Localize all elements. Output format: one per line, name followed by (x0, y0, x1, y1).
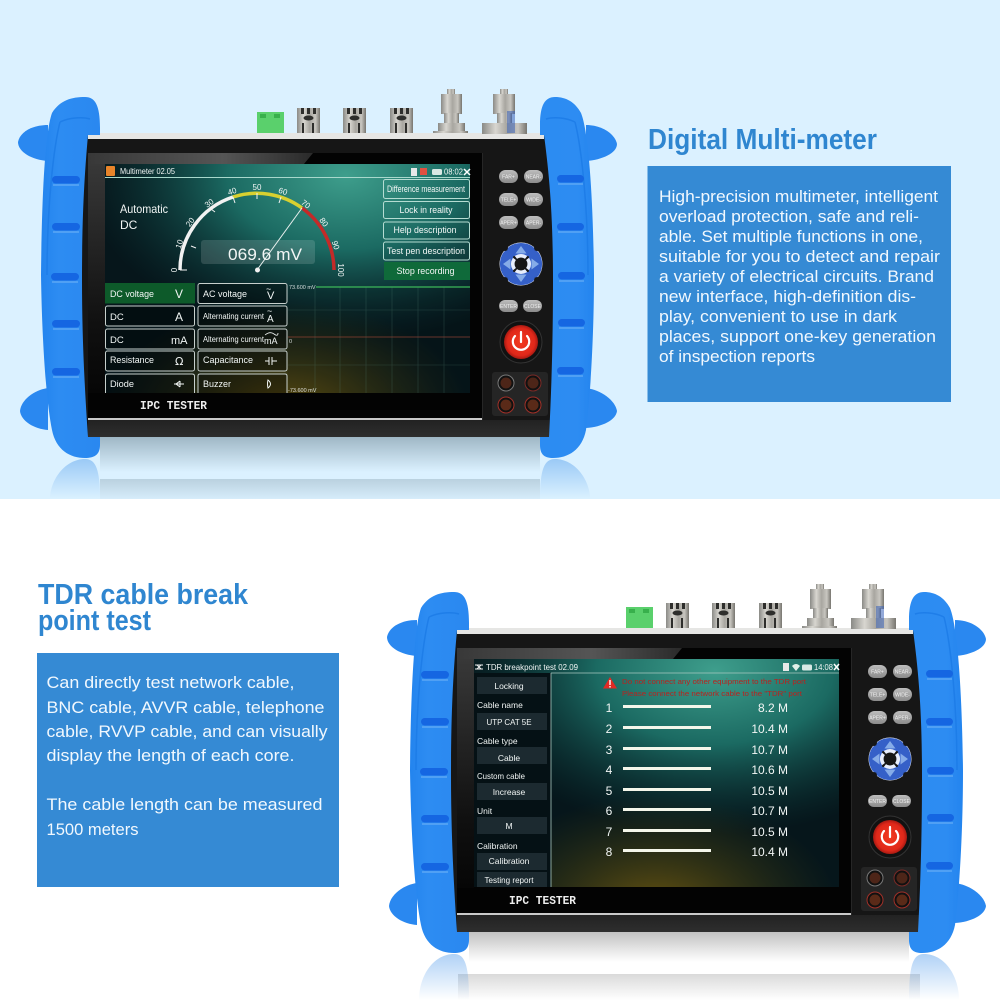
settings column: Cable type (477, 736, 518, 746)
settings column: Calibration (477, 841, 518, 851)
cable core results (606, 701, 788, 859)
measurement mode buttons: Buzzer (203, 379, 231, 390)
panel: multimeter description: High-precision multimeter, intelligent (659, 187, 938, 206)
gauge: 90 (330, 240, 341, 251)
device shell (18, 89, 617, 458)
measurement mode buttons: mA (171, 335, 188, 347)
screen (105, 164, 470, 394)
gauge: 0 (170, 267, 179, 272)
title bar: 14:08 (814, 663, 834, 672)
gauge: 100 (336, 263, 345, 277)
waveform chart: 73.600 mV (289, 285, 316, 291)
screen (474, 659, 839, 887)
measurement mode buttons: V (175, 287, 183, 301)
device: multimeter tester (18, 89, 617, 458)
side keys: APER- (526, 220, 541, 226)
cable core results: 3 (606, 743, 613, 757)
title bar: Multimeter 02.05 (120, 167, 175, 176)
gauge: 30 (203, 197, 216, 210)
settings column: Unit (477, 806, 493, 816)
panel: TDR description: display the length of each core. (46, 746, 294, 765)
cable core results: 10.4 M (751, 845, 788, 859)
side keys (868, 665, 912, 807)
heading: TDR cable break point test: TDR cable break (38, 579, 249, 611)
cable core results: 10.7 M (751, 804, 788, 818)
measurement mode buttons: Alternating current (203, 312, 265, 321)
panel: TDR description: 1500 meters (46, 820, 138, 839)
panel: multimeter description: a variety of electrical circuits. Brand (659, 267, 934, 286)
right function buttons: Difference measurement (387, 184, 465, 194)
device: TDR tester (387, 584, 986, 953)
heading: Digital Multi-meter: Digital Multi-meter (648, 124, 877, 156)
side keys: TELE+ (870, 692, 885, 698)
side keys: TELE+ (501, 198, 516, 204)
right function buttons: Help description (394, 225, 456, 235)
measurement mode buttons: Capacitance (203, 355, 253, 366)
reflection under top device (50, 437, 590, 499)
bottom background (0, 499, 1000, 1000)
title bar (475, 662, 839, 672)
title bar: TDR breakpoint test 02.09 (486, 662, 578, 672)
panel: multimeter description: suitable for you to detect and repair (659, 247, 940, 266)
settings column: Locking (494, 681, 524, 691)
gauge: 50 (253, 183, 262, 192)
warning icon (603, 677, 617, 688)
side keys: WIDE- (526, 198, 541, 204)
panel: multimeter description: overload protection, safe and reli- (659, 207, 919, 226)
panel: multimeter description: places, support one-key generation (659, 327, 936, 346)
measurement mode buttons: ~ (266, 284, 271, 294)
side keys: NEAR- (526, 174, 542, 180)
side keys: NEAR- (895, 670, 911, 676)
right function buttons: Lock in reality (400, 205, 453, 215)
waveform chart (288, 285, 470, 394)
reflection under bottom device (419, 932, 959, 1000)
cable core results: 10.6 M (751, 763, 788, 777)
measurement mode buttons: A (175, 310, 183, 324)
measurement mode buttons: DC (110, 335, 124, 346)
right function buttons: Test pen description (387, 246, 465, 256)
side keys: APER+ (500, 220, 517, 226)
side keys: FAR+ (871, 670, 884, 676)
cable core results: 6 (606, 804, 613, 818)
settings column: Cable name (477, 700, 523, 710)
measurement mode buttons: V (267, 290, 275, 302)
side keys: CLOSE (893, 799, 911, 805)
cable core results: 2 (606, 722, 613, 736)
settings column: Increase (493, 787, 526, 797)
gauge: 069.6 mV (228, 245, 303, 264)
cable core results: 4 (606, 763, 613, 777)
gauge: 10 (174, 238, 185, 250)
mode text (120, 202, 168, 232)
cable core results: 10.5 M (751, 825, 788, 839)
panel: TDR description (37, 653, 339, 887)
side keys: CLOSE (524, 304, 542, 310)
measurement mode buttons: DC voltage (110, 289, 154, 300)
panel: TDR description: Can directly test network cable, (46, 673, 294, 692)
side keys: WIDE- (895, 692, 910, 698)
measurement mode buttons: A (267, 314, 274, 325)
title bar (105, 166, 470, 178)
settings column (477, 677, 547, 887)
warning text: Do not connect any other equipment to the TDR port (622, 677, 807, 686)
side keys: FAR+ (502, 174, 515, 180)
side keys: APER+ (869, 716, 886, 722)
cable core results: 8 (606, 845, 613, 859)
measurement mode buttons: ~ (267, 306, 272, 316)
panel: multimeter description: able. Set multiple functions in one, (659, 227, 923, 246)
settings column: M (505, 821, 513, 831)
side keys: APER- (895, 716, 910, 722)
cable core results: 10.4 M (751, 722, 788, 736)
cable core results: 5 (606, 784, 613, 798)
brand label: IPC TESTER (140, 400, 207, 413)
measurement mode buttons: DC (110, 312, 124, 323)
cable core results: 7 (606, 825, 613, 839)
panel: TDR description: cable, RVVP cable, and can visually (46, 722, 328, 741)
heading: TDR cable break point test (38, 579, 249, 637)
heading: TDR cable break point test: point test (38, 605, 151, 637)
gauge: 40 (227, 186, 238, 197)
side keys: ENTER (500, 304, 517, 310)
gauge: 20 (184, 216, 197, 229)
settings column: UTP CAT 5E (486, 717, 532, 727)
gauge: 80 (317, 216, 330, 229)
settings column: Testing report (484, 875, 534, 885)
cable core results: 8.2 M (758, 701, 788, 715)
panel: TDR description: The cable length can be measured (46, 795, 322, 814)
mode text: DC (120, 218, 138, 232)
device shell (387, 584, 986, 953)
panel: multimeter description: play, convenient to use in dark (659, 307, 898, 326)
measurement mode buttons (105, 283, 287, 393)
panel: multimeter description: new interface, high-definition dis- (659, 287, 916, 306)
settings column: Cable (498, 753, 520, 763)
cable core results: 10.5 M (751, 784, 788, 798)
panel: TDR description: BNC cable, AVVR cable, telephone (46, 698, 324, 717)
side keys: ENTER (869, 799, 886, 805)
settings column: Calibration (489, 856, 530, 866)
panel: multimeter description: of inspection reports (659, 347, 815, 366)
right function buttons: Stop recording (396, 266, 454, 276)
gauge: 60 (277, 186, 289, 197)
measurement mode buttons: Ω (175, 355, 183, 368)
measurement mode buttons: Diode (110, 379, 134, 390)
settings column: Custom cable (477, 771, 525, 781)
top background band (0, 0, 1000, 499)
measurement mode buttons: AC voltage (203, 289, 247, 300)
waveform chart: -73.600 mV (288, 388, 317, 394)
gauge: 70 (299, 198, 312, 211)
title bar: 08:02 (444, 168, 464, 176)
side keys (499, 170, 543, 312)
cable core results: 10.7 M (751, 743, 788, 757)
measurement mode buttons: mA (264, 336, 278, 346)
right function buttons (384, 180, 470, 280)
measurement mode buttons: Alternating current (203, 335, 265, 344)
mode text: Automatic (120, 202, 168, 216)
brand label: IPC TESTER (509, 895, 576, 908)
gauge (170, 183, 345, 277)
cable core results: 1 (606, 701, 613, 715)
warning text (622, 677, 807, 698)
warning text: Please connect the network cable to the "TDR" port (622, 689, 803, 698)
measurement mode buttons: Resistance (110, 355, 154, 366)
waveform chart: 0 (289, 339, 292, 345)
panel: multimeter description (648, 166, 951, 402)
